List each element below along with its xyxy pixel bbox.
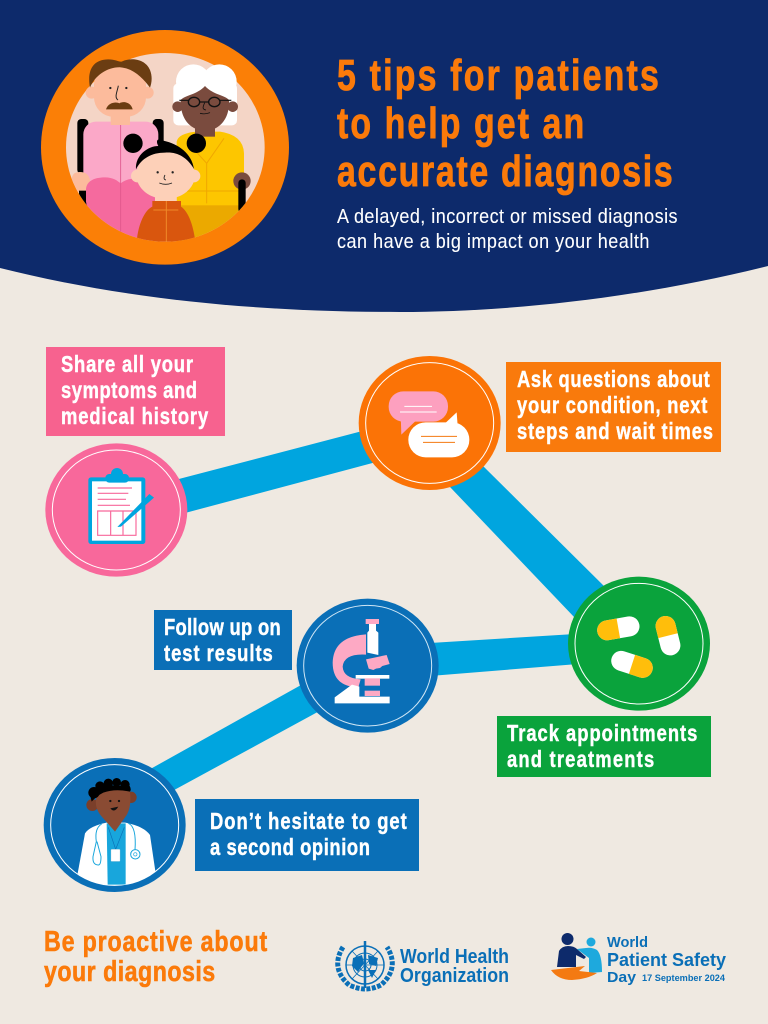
panel: share symptoms label: medical history	[61, 404, 209, 430]
icon: doctor badge	[44, 758, 186, 892]
icon: pills badge	[568, 577, 710, 711]
panel: ask questions label: steps and wait times	[517, 419, 713, 445]
closing message	[44, 924, 267, 988]
subtitle: A delayed, incorrect or missed diagnosis	[337, 206, 678, 228]
panel: follow up label: Follow up on	[164, 615, 281, 641]
subtitle	[337, 206, 678, 253]
logo: World Health Organization: World Health	[400, 946, 509, 968]
panel: share symptoms label: symptoms and	[61, 378, 197, 404]
panel: ask questions label	[506, 362, 721, 452]
logo: World Patient Safety Day: Patient Safety	[607, 950, 726, 970]
panel: track appointments label	[497, 716, 711, 777]
logo: World Health Organization	[338, 941, 509, 989]
title	[337, 51, 673, 196]
subtitle: can have a big impact on your health	[337, 231, 649, 253]
title: accurate diagnosis	[337, 147, 673, 196]
panel: share symptoms label	[46, 347, 225, 436]
panel: ask questions label: Ask questions about	[517, 367, 710, 393]
closing message: Be proactive about	[44, 924, 267, 958]
logo: World Patient Safety Day: Day	[607, 969, 637, 986]
panel: track appointments label: Track appointments	[507, 721, 697, 747]
icon: clipboard badge	[45, 443, 187, 577]
closing message: your diagnosis	[44, 954, 215, 988]
logo: World Health Organization: Organization	[400, 965, 509, 987]
logo: World Patient Safety Day: 17 September 2024	[642, 973, 725, 983]
connector path	[145, 429, 610, 795]
title: 5 tips for patients	[337, 51, 659, 100]
panel: ask questions label: your condition, next	[517, 393, 707, 419]
icon: microscope badge	[297, 599, 439, 733]
logo: World Patient Safety Day: World	[607, 934, 648, 951]
header band	[0, 0, 768, 312]
panel: share symptoms label: Share all your	[61, 352, 193, 378]
icon: speech bubbles badge	[359, 356, 501, 490]
illustration: family group	[41, 30, 289, 265]
panel: second opinion label: Don’t hesitate to get	[210, 809, 407, 835]
logo: World Patient Safety Day	[551, 933, 726, 986]
panel: follow up label: test results	[164, 641, 273, 667]
title: to help get an	[337, 99, 584, 148]
panel: track appointments label: and treatments	[507, 747, 654, 773]
panel: second opinion label	[195, 799, 419, 871]
panel: second opinion label: a second opinion	[210, 835, 370, 861]
panel: follow up label	[154, 610, 292, 670]
